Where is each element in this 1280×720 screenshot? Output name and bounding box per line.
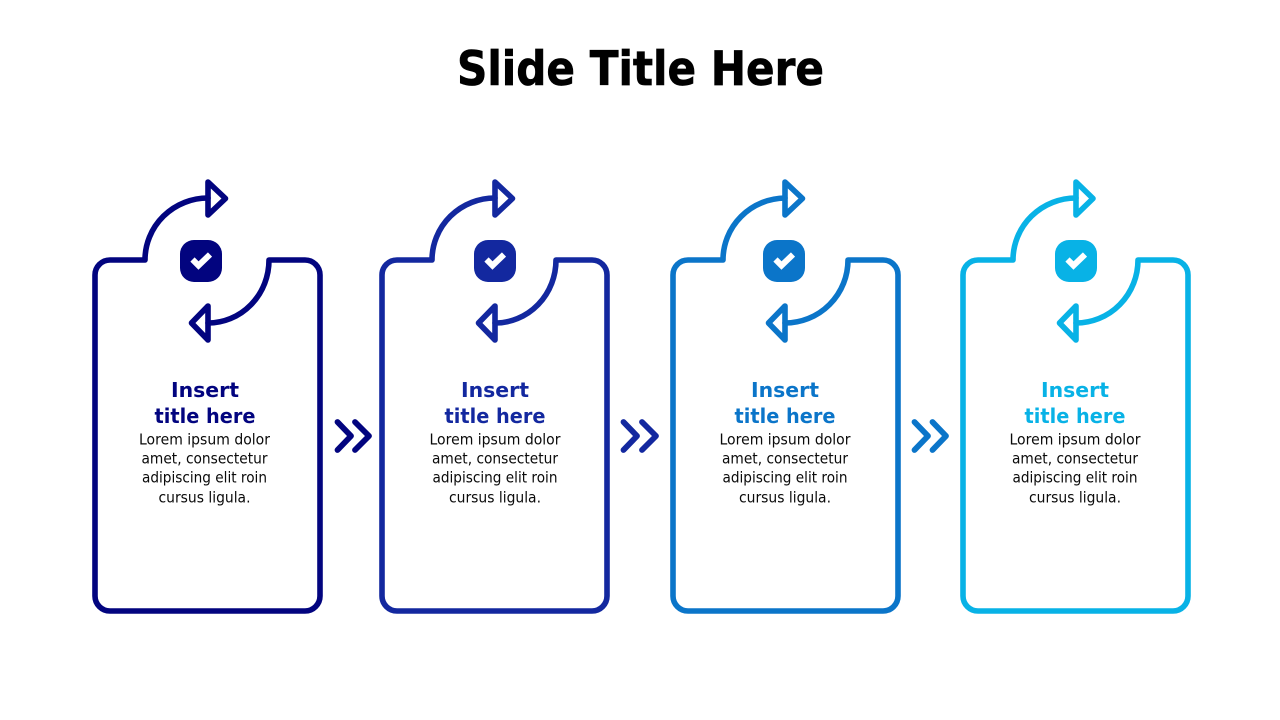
icon: check badge [763,240,805,282]
body text [1010,430,1141,506]
heading: Insert [1041,378,1109,402]
heading: title here [154,404,256,428]
heading [444,378,546,428]
body text: Lorem ipsum dolor [430,430,561,448]
panel: step 4 [963,182,1188,611]
body text: amet, consectetur [432,449,559,467]
panel: step 3 [673,182,898,611]
body text: cursus ligula. [449,488,541,506]
heading [734,378,836,428]
card outline with curved arrows [673,182,898,611]
heading: Insert [751,378,819,402]
icon: check badge [474,240,516,282]
card outline with curved arrows [95,182,320,611]
panel: step 2 [382,182,607,611]
body text: adipiscing elit roin [432,468,558,486]
body text [139,430,271,506]
heading: title here [1024,404,1126,428]
body text: cursus ligula. [739,488,831,506]
body text: amet, consectetur [142,449,268,467]
body text: adipiscing elit roin [1012,468,1138,486]
heading [154,378,256,428]
icon: check badge [180,240,222,282]
title: Slide Title Here [457,42,824,97]
heading: title here [734,404,836,428]
arrow: chevrons 2 to 3 [624,422,656,450]
body text: Lorem ipsum dolor [1010,430,1141,448]
body text [430,430,561,506]
icon: check badge [1055,240,1097,282]
arrow: chevrons 3 to 4 [914,422,946,450]
body text: Lorem ipsum dolor [139,430,271,448]
heading: title here [444,404,546,428]
heading: Insert [171,378,239,402]
body text: adipiscing elit roin [722,468,848,486]
body text: Lorem ipsum dolor [720,430,851,448]
body text: adipiscing elit roin [142,468,267,486]
panel: step 1 [95,182,320,611]
arrow: chevrons 1 to 2 [338,422,369,450]
card outline with curved arrows [963,182,1188,611]
body text: amet, consectetur [722,449,849,467]
body text: cursus ligula. [158,488,250,506]
heading: Insert [461,378,529,402]
heading [1024,378,1126,428]
body text [720,430,851,506]
body text: amet, consectetur [1012,449,1139,467]
card outline with curved arrows [382,182,607,611]
body text: cursus ligula. [1029,488,1121,506]
